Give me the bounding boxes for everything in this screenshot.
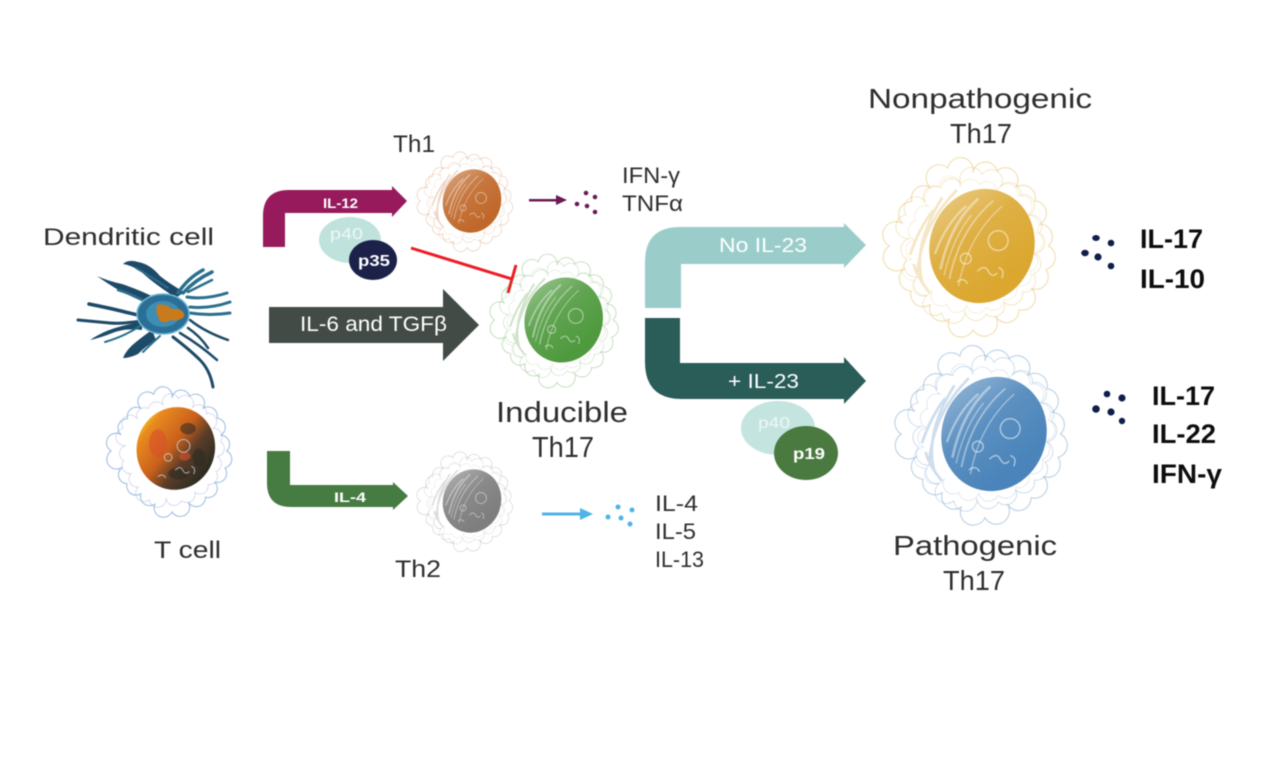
icon: Inducible Th17 cell xyxy=(478,242,631,397)
text: nonpathogenic cytokines: IL-10 xyxy=(1140,264,1205,294)
text: Th1 cytokines xyxy=(622,163,683,216)
text: pathogenic cytokines: IL-22 xyxy=(1152,419,1216,449)
icon: Nonpathogenic Th17 cell xyxy=(867,142,1072,350)
badge: p40 and p35: p35 xyxy=(358,253,390,270)
label: Pathogenic Th17: Th17 xyxy=(943,565,1005,596)
label: T cell: T cell xyxy=(154,537,221,564)
icon: Th1 cell xyxy=(408,143,522,259)
label: Inducible Th17: Inducible xyxy=(496,397,628,429)
text: nonpathogenic cytokines xyxy=(1140,224,1205,294)
label: Nonpathogenic Th17: Nonpathogenic xyxy=(868,83,1092,114)
arrow: IL-4 xyxy=(267,451,408,510)
text: Th1 cytokines: IFN-γ xyxy=(622,163,680,188)
arrow: + IL-23 xyxy=(645,318,866,404)
arrow: No IL-23 xyxy=(645,223,866,308)
badge: p40 and p35: p40 xyxy=(330,226,363,243)
badge: p40 and p19 xyxy=(741,401,838,480)
text: Th2 cytokines xyxy=(655,491,704,572)
arrow: + IL-23: + IL-23 xyxy=(728,371,799,393)
icon: dendritic cell xyxy=(78,261,230,387)
label: Th2: Th2 xyxy=(395,556,441,583)
text: pathogenic cytokines: IFN-γ xyxy=(1152,459,1222,489)
label: Nonpathogenic Th17: Th17 xyxy=(950,118,1012,149)
text: Th1 cytokines: TNFα xyxy=(622,191,683,216)
icon: Th2 cytokine dots xyxy=(606,504,634,526)
arrow: No IL-23: No IL-23 xyxy=(719,235,807,257)
icon: Pathogenic Th17 cell xyxy=(879,330,1084,538)
arrow: Th2 secretion xyxy=(542,508,593,520)
arrow: IL-6 and TGF-beta: IL-6 and TGFβ xyxy=(300,313,447,336)
arrow: IL-6 and TGF-beta xyxy=(269,289,479,361)
label: Th1: Th1 xyxy=(393,131,435,158)
text: Th2 cytokines: IL-13 xyxy=(655,547,704,572)
text: Th2 cytokines: IL-4 xyxy=(655,491,698,516)
inhibition line: red xyxy=(411,248,516,293)
badge: p40 and p19: p40 xyxy=(758,415,790,432)
label: Inducible Th17 xyxy=(496,397,628,464)
label: Dendritic cell: Dendritic cell xyxy=(43,224,214,251)
text: nonpathogenic cytokines: IL-17 xyxy=(1140,224,1203,254)
icon: T cell xyxy=(95,375,244,526)
label: Inducible Th17: Th17 xyxy=(532,432,594,464)
icon: Th1 cytokine dots xyxy=(575,191,597,214)
label: Pathogenic Th17: Pathogenic xyxy=(893,530,1057,561)
badge: p40 and p35 xyxy=(319,217,397,280)
icon: pathogenic cytokine dots xyxy=(1092,391,1126,424)
text: pathogenic cytokines xyxy=(1152,381,1222,489)
label: Pathogenic Th17 xyxy=(893,530,1057,596)
icon: Th2 cell xyxy=(408,443,522,559)
arrow: IL-12 xyxy=(263,186,407,247)
arrow: Th1 secretion xyxy=(529,195,567,205)
text: Th2 cytokines: IL-5 xyxy=(655,519,696,544)
arrow: IL-4: IL-4 xyxy=(334,489,366,505)
arrow: IL-12: IL-12 xyxy=(323,195,358,211)
label: Nonpathogenic Th17 xyxy=(868,83,1092,149)
badge: p40 and p19: p19 xyxy=(793,446,825,463)
text: pathogenic cytokines: IL-17 xyxy=(1152,381,1215,411)
icon: nonpathogenic cytokine dots xyxy=(1081,235,1114,269)
